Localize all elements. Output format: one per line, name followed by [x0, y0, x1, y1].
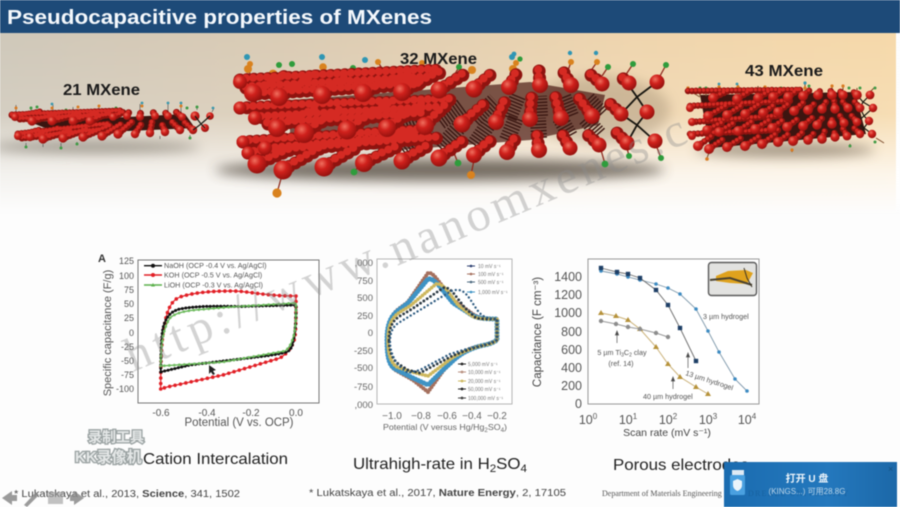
annotations: 2 — [629, 352, 632, 358]
recorder logo watermark: KK录像机 — [75, 448, 142, 466]
legend: NaOH (OCP -0.4 V vs. Ag/AgCl) — [164, 261, 267, 270]
popup detail: (KINGS...) 可用28.8G — [769, 487, 845, 496]
slide navigation arrows — [2, 491, 84, 507]
x axis labels: 10 — [619, 413, 633, 427]
x axis title: Potential (V versus Hg/Hg — [383, 422, 481, 432]
annotations — [597, 312, 749, 401]
x axis title: 4 — [501, 428, 505, 434]
reference 1: * Lukatskaya et al., 2013, Science , 341, 1502 — [14, 489, 240, 500]
url watermark — [117, 103, 694, 382]
legend: 10 mV s⁻¹ — [478, 264, 501, 270]
annotations: C — [624, 348, 629, 357]
y axis labels: -500 — [354, 363, 373, 374]
y axis labels: 1000 — [554, 306, 582, 320]
x axis labels: 10 — [659, 413, 673, 427]
x axis labels: 10 — [579, 413, 593, 427]
y axis labels: ,000 — [354, 258, 373, 269]
x axis labels: 4 — [752, 412, 757, 421]
y axis labels: 250 — [357, 311, 373, 322]
heading: Porous electrodes: Porous electrodes — [613, 457, 749, 474]
department footer: Department of Materials Engineering — [602, 489, 722, 498]
NaOH curve — [161, 305, 296, 372]
legend: 100,000 mV s⁻¹ — [468, 396, 503, 402]
clay curve — [599, 319, 670, 339]
CV loops — [387, 273, 497, 392]
x axis labels: −0.4 — [462, 411, 482, 422]
title bar — [0, 0, 900, 33]
x axis title: SO — [488, 422, 501, 432]
21 MXene structure — [0, 102, 214, 153]
x axis labels: -0.2 — [242, 408, 260, 419]
x axis labels: −0.2 — [487, 411, 507, 422]
arrows — [615, 331, 690, 389]
x axis labels: 10 — [738, 413, 752, 427]
label: 32 MXene: 32 MXene — [400, 51, 477, 68]
chart: ultrahigh-rate CV — [354, 258, 512, 434]
x axis title: Scan rate (mV s⁻¹) — [623, 427, 711, 439]
usb icon — [730, 470, 745, 495]
legend — [144, 261, 267, 290]
y axis labels: 0 — [575, 397, 582, 411]
x axis labels: -0.6 — [152, 408, 170, 419]
stems and ligands — [244, 51, 669, 198]
usb notification popup — [724, 462, 897, 507]
heading: Ultrahigh-rate in H2SO4: Ultrahigh-rate in H — [353, 456, 483, 473]
y axis labels: 1400 — [554, 270, 582, 284]
recorder logo watermark — [75, 429, 144, 466]
popup close: × — [888, 464, 893, 474]
y axis labels: 0 — [368, 328, 373, 339]
x axis labels — [152, 408, 303, 419]
annotations: 5 µm Ti — [597, 348, 621, 357]
legend: 10,000 mV s⁻¹ — [468, 370, 501, 376]
annotations: 40 µm hydrogel — [643, 392, 693, 401]
y axis labels: 50 — [124, 299, 134, 309]
heading: Ultrahigh-rate in H2SO4: 4 — [521, 463, 527, 475]
43 MXene structure — [686, 81, 884, 161]
reference 2: * Lukatskaya et al., 2017, Nature Energy , 2, 17105 — [309, 488, 566, 499]
KOH curve — [161, 291, 296, 389]
y axis labels: 100 — [119, 271, 134, 281]
LiOH curve — [161, 303, 296, 366]
x axis labels: 2 — [673, 412, 678, 421]
legend: 1,000 mV s⁻¹ — [478, 290, 508, 296]
legend: 20,000 mV s⁻¹ — [468, 379, 501, 385]
heading: Ultrahigh-rate in H2SO4: 2 — [490, 463, 496, 475]
y axis labels: 25 — [124, 313, 134, 323]
chart: porous electrodes rate capability — [532, 259, 759, 439]
y axis labels: 500 — [357, 293, 373, 304]
x axis labels: 0.0 — [289, 408, 303, 419]
x axis labels: 0 — [593, 412, 598, 421]
x axis labels: 10 — [699, 413, 713, 427]
mouse cursor — [209, 365, 216, 375]
heading: Cation Intercalation: Cation Intercalation — [143, 451, 288, 468]
url watermark: nanomxenes.c — [381, 103, 694, 276]
legend — [458, 264, 508, 402]
x axis title: ) — [504, 422, 507, 432]
recorder logo watermark: 录制工具 — [88, 429, 144, 445]
y axis labels: -25 — [121, 342, 134, 352]
y axis title: Specific capacitance (F/g) — [102, 270, 114, 396]
label: 43 MXene: 43 MXene — [745, 63, 823, 80]
legend: KOH (OCP -0.5 V vs. Ag/AgCl) — [164, 270, 262, 280]
legend: LiOH (OCP -0.3 V vs. Ag/AgCl) — [164, 280, 263, 290]
y axis labels: 1200 — [554, 288, 582, 302]
y axis labels: 200 — [561, 379, 582, 393]
chart: cation intercalation CV — [98, 253, 319, 429]
faint footer text behind popup: DREXEL UNIVERSITY — [748, 489, 850, 498]
x axis labels: 1 — [633, 412, 638, 421]
13 um curve — [599, 266, 698, 363]
annotations: 13 µm hydrogel — [684, 368, 735, 392]
annotations: (ref. 14) — [608, 359, 634, 368]
y axis labels: ,000 — [354, 400, 373, 411]
annotations: 3 µm hydrogel — [703, 312, 749, 321]
y axis labels: 400 — [561, 361, 582, 375]
inset icon — [708, 262, 756, 296]
heading: Ultrahigh-rate in H2SO4: SO — [496, 456, 521, 473]
y axis labels: 800 — [561, 325, 582, 339]
front atoms — [233, 74, 664, 180]
y axis labels: 125 — [119, 256, 134, 266]
x axis title: Potential (V vs. OCP) — [184, 417, 294, 429]
y axis title: Capacitance (F cm⁻³) — [532, 277, 544, 387]
url watermark: http://www. — [117, 226, 396, 382]
y axis labels: -50 — [121, 356, 134, 366]
dark bonds — [290, 82, 605, 150]
y axis labels — [554, 270, 582, 411]
x axis title: 2 — [484, 428, 489, 434]
bead chains — [243, 130, 627, 170]
y axis labels — [116, 256, 134, 394]
x axis labels: −0.8 — [411, 411, 431, 422]
annotations: 3 — [621, 352, 624, 358]
x axis labels — [382, 411, 507, 422]
x axis labels: −0.6 — [437, 411, 457, 422]
y axis labels: -750 — [354, 382, 373, 393]
popup title: 打开 U 盘 — [786, 472, 828, 485]
legend: 500 mV s⁻¹ — [478, 280, 504, 286]
x axis labels — [579, 412, 757, 427]
x axis labels: -0.4 — [198, 408, 216, 419]
y axis labels: 0 — [129, 328, 134, 338]
y axis labels: 75 — [124, 285, 134, 295]
y axis labels — [354, 258, 373, 411]
legend: 5,000 mV s⁻¹ — [468, 362, 498, 368]
32 MXene structure — [215, 51, 670, 198]
x axis labels: −1.0 — [382, 411, 402, 422]
x axis labels: 3 — [713, 412, 718, 421]
hero background — [0, 33, 900, 213]
y axis labels: -250 — [354, 346, 373, 357]
annotations: clay — [632, 348, 647, 357]
legend: 50,000 mV s⁻¹ — [468, 387, 501, 393]
legend: 100 mV s⁻¹ — [478, 272, 504, 278]
y axis labels: -100 — [116, 384, 134, 394]
y axis labels: 600 — [561, 343, 582, 357]
label: 21 MXene: 21 MXene — [63, 82, 140, 99]
panel letter A: A — [98, 253, 106, 265]
y axis labels: -75 — [121, 370, 134, 380]
40 um curve — [598, 310, 711, 396]
3 um curve — [599, 269, 749, 393]
y axis labels: 750 — [357, 276, 373, 287]
title bar: Pseudocapacitive properties of MXenes — [7, 6, 432, 29]
